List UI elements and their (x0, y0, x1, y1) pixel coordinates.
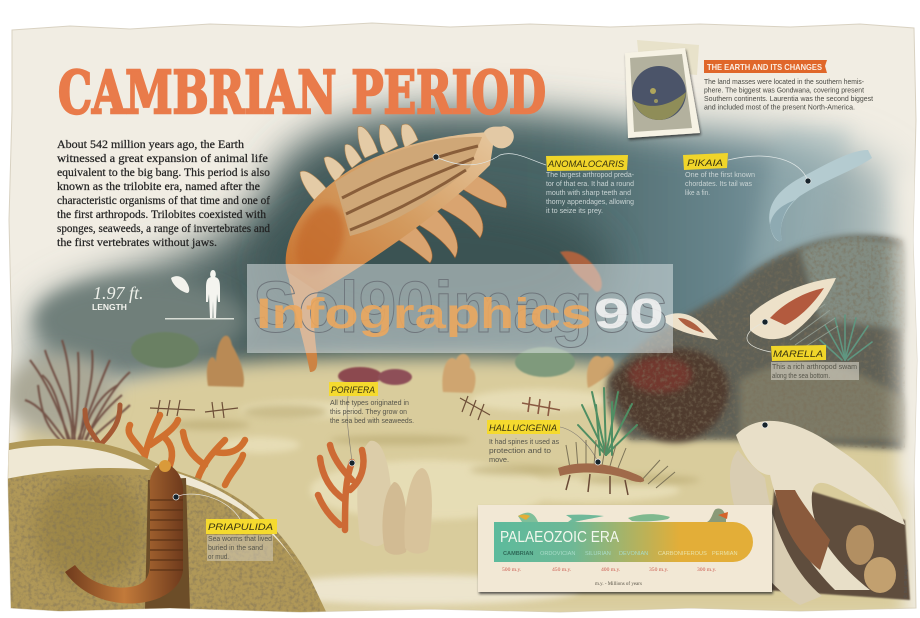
large foreground shell (730, 421, 910, 605)
era title: PALAEOZOIC ERA (500, 529, 620, 546)
callout: porifera: PORIFERA (331, 385, 375, 396)
callout: anomalocaris: ANOMALOCARIS (547, 159, 625, 170)
sand highlights (220, 389, 680, 605)
creature: anomalocaris (286, 124, 514, 372)
callout: porifera (329, 382, 414, 466)
callout: pikaia: PIKAIA (687, 158, 723, 169)
left plant (25, 340, 130, 440)
priapulida worm (65, 460, 183, 603)
callout: anomalocaris: it to seize its prey. (546, 208, 603, 215)
callout: priapulida: buried in the sand (208, 545, 263, 552)
callout: marella: MARELLA (773, 349, 823, 360)
intro text (57, 138, 270, 249)
panel: the earth and its changes (704, 60, 873, 112)
time scale: 450 m.y. (552, 567, 572, 573)
panel: palaeozoic era (478, 505, 772, 592)
callout: porifera: All the types originated in (330, 400, 409, 407)
title: CAMBRIAN PERIOD (58, 58, 546, 127)
left water haze (35, 278, 245, 362)
callout: porifera: this period. They grow on (330, 409, 407, 416)
heading (704, 60, 827, 73)
intro text: the first vertebrates without jaws. (57, 236, 217, 249)
burrow mound (0, 439, 330, 618)
distant red creature (560, 251, 602, 292)
time scale: 400 m.y. (601, 567, 621, 573)
period labels: ORDOVICIAN (540, 551, 575, 557)
intro text: sponges, seaweeds, a range of invertebrates and (57, 222, 270, 235)
scale note: m.y. - Millions of years (595, 582, 642, 587)
callout dot: foreground shell (762, 422, 768, 428)
intro text: the first arthropods. Trilobites coexisted with (57, 208, 266, 221)
watermark: Infographics (256, 290, 592, 338)
right rock mass (600, 230, 910, 455)
scale ground line (165, 318, 234, 320)
callout: pikaia: like a fin. (685, 190, 710, 197)
length value: 1.97 ft. (93, 283, 144, 303)
callout: anomalocaris: The largest arthropod preda- (546, 172, 634, 179)
period labels: CARBONIFEROUS (658, 551, 707, 557)
copyright: © Sol 90 Images (902, 564, 908, 598)
length scale (92, 270, 234, 320)
body text (704, 79, 873, 112)
callout: anomalocaris (433, 154, 634, 215)
icon: human silhouette (206, 270, 220, 318)
body text: Southern continents. Laurentia was the second biggest (704, 96, 873, 103)
ventral spines (398, 176, 507, 264)
left sand haze (5, 355, 115, 435)
carapace (335, 137, 482, 236)
length label: LENGTH (92, 302, 127, 312)
tail (288, 272, 318, 372)
period labels: DEVONIAN (619, 551, 648, 557)
callout: marella: This a rich arthropod swam (772, 364, 857, 371)
time scale (502, 567, 717, 573)
small trilobites on sand (150, 396, 560, 420)
intro text: known as the trilobite era, named after the (57, 180, 260, 193)
callout: pikaia (683, 153, 811, 197)
body text: The land masses were located in the southern hemis- (704, 79, 865, 86)
watermark: Sol90images (253, 268, 668, 348)
dorsal spines (300, 124, 418, 204)
watermark: 90 (594, 290, 664, 338)
intro text: About 542 million years ago, the Earth (57, 138, 244, 151)
hallucigenia (558, 440, 675, 495)
time scale: 300 m.y. (697, 567, 717, 573)
period labels (503, 551, 738, 557)
body text: and included most of the present North-America. (704, 104, 855, 112)
rear highlight (296, 204, 347, 264)
callout: priapulida (173, 494, 277, 561)
period labels: PERMIAN (712, 551, 738, 557)
period labels: SILURIAN (585, 551, 611, 557)
body text: phere. The biggest was Gondwana, covering present (704, 88, 864, 94)
callout: priapulida: PRIAPULIDA (208, 522, 273, 533)
sand floor (15, 358, 905, 618)
callout: priapulida: Sea worms that lived (208, 536, 272, 543)
era gradient bar (494, 522, 753, 562)
callout: marella (747, 319, 859, 380)
time scale: 350 m.y. (649, 567, 669, 573)
intro text: characteristic organisms of that time and one of (57, 194, 270, 207)
callout: marella: along the sea bottom. (772, 373, 830, 380)
callout: hallucigenia: HALLUCIGENIA (489, 423, 557, 434)
coral group (85, 405, 245, 488)
light rays (746, 124, 848, 271)
callout: pikaia: One of the first known (685, 172, 755, 179)
distant reef (131, 332, 614, 393)
intro text: witnessed a great expansion of animal life (57, 152, 268, 165)
callout: priapulida: or mud. (208, 554, 229, 561)
photo: earth globe (625, 40, 700, 138)
head (484, 126, 514, 148)
callout: hallucigenia (487, 420, 601, 465)
callout: anomalocaris: tor of that era. It had a round (546, 181, 634, 188)
callout: anomalocaris: thorny appendages, allowing (546, 199, 634, 206)
time scale: 500 m.y. (502, 567, 522, 573)
body (286, 132, 495, 294)
period labels: CAMBRIAN (503, 551, 533, 557)
water (30, 110, 895, 390)
era panel background (478, 505, 772, 592)
callout: hallucigenia: It had spines it used as (489, 439, 560, 446)
intro text: equivalent to the big bang. This period is also (57, 166, 270, 179)
anemones (578, 315, 872, 455)
callout: anomalocaris: mouth with sharp teeth and (546, 190, 631, 197)
dark water centre (364, 200, 618, 301)
callout: hallucigenia: move. (489, 457, 509, 464)
tube sponges (357, 441, 432, 555)
callout: porifera: the sea bed with seaweeds. (330, 418, 414, 425)
heading: THE EARTH AND ITS CHANGES (707, 63, 822, 72)
carapace bands (342, 146, 478, 230)
coral centre (318, 445, 364, 530)
right edge fade (898, 170, 920, 490)
callout: pikaia: chordates. Its tail was (685, 181, 753, 188)
sand shadows (170, 405, 700, 485)
creature: marella shells (665, 278, 838, 350)
era creature silhouettes (518, 509, 728, 522)
icon: creature silhouette (171, 276, 189, 293)
creature: pikaia (769, 150, 872, 241)
callout: hallucigenia: protection and to (489, 448, 551, 455)
